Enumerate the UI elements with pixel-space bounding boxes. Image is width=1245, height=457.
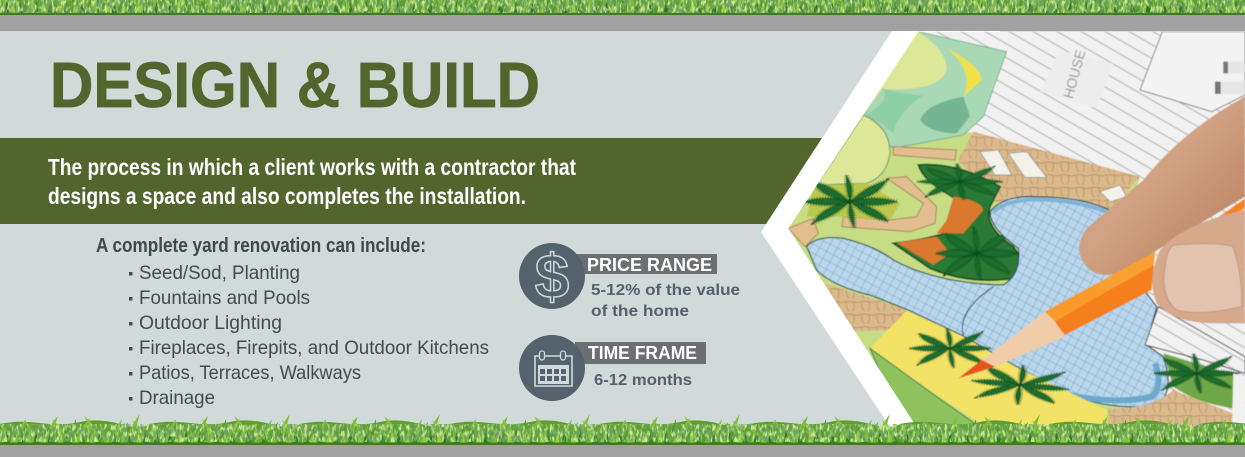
stone terrace: [958, 132, 1140, 210]
list item: fireplaces: Fireplaces, Firepits, and Outdoor Kitchens: [139, 337, 489, 359]
list item: patios: Patios, Terraces, Walkways: [139, 362, 361, 384]
heading: DESIGN & BUILD: [50, 49, 540, 121]
price value: of the home: [591, 303, 689, 320]
pencil: [958, 198, 1245, 378]
list item: fountains: Fountains and Pools: [139, 287, 310, 309]
white chevron frame: [761, 31, 1000, 430]
curved stone steps: [788, 147, 957, 247]
description text: The process in which a client works with a contractor that: [48, 154, 576, 180]
garden base: [789, 132, 1166, 424]
thumbnail: [1164, 244, 1242, 313]
lower palms: [909, 328, 1076, 409]
bottom grass strip: [0, 413, 1245, 445]
time frame block: [519, 335, 706, 401]
swimming pool: [807, 197, 1168, 407]
list heading: A complete yard renovation can include:: [96, 235, 426, 257]
yellow planting strip: [870, 310, 1107, 427]
garden palms upper: [802, 163, 1018, 280]
icon: calendar: [519, 335, 585, 401]
house outline on the plan: [1140, 32, 1245, 112]
lower right margin: [1232, 372, 1245, 422]
pool inner line: [962, 287, 993, 336]
pool coping: [1070, 363, 1158, 400]
price range block: [519, 243, 740, 320]
olive description band: [0, 138, 822, 224]
finger: [1079, 97, 1245, 275]
lower right stone path: [1108, 390, 1233, 427]
price value: [591, 282, 740, 320]
green planting strip: [868, 346, 975, 424]
left tree bed: [807, 183, 900, 220]
upper lawn and stream: [788, 30, 1007, 228]
terrace seating pads: [980, 150, 1127, 202]
photo: hand drawing a landscape plan: [783, 30, 1245, 443]
list item: seed and sod: Seed/Sod, Planting: [139, 262, 300, 284]
lower plan hatch area: [1145, 307, 1245, 373]
description text: designs a space and also completes the installation.: [48, 183, 526, 209]
plan windows: [1221, 62, 1245, 94]
pool coping upper: [993, 199, 1107, 212]
icon: dollar sign: [519, 243, 585, 312]
thumb: [1152, 210, 1245, 323]
time label bar: [575, 342, 706, 364]
house label on the plan: [1040, 48, 1113, 108]
flower bed: [893, 165, 1019, 280]
bottom grey band: [0, 444, 1245, 457]
top grass strip: [0, 0, 1245, 15]
top grey band: [0, 15, 1245, 31]
house label on the plan: HOUSE: [1060, 48, 1088, 100]
time value: 6-12 months: [594, 372, 692, 389]
plan window ends: [1215, 62, 1228, 94]
icon: dollar sign: $: [535, 243, 569, 312]
time label: TIME FRAME: [588, 343, 697, 363]
lower right plantings: [1153, 353, 1240, 408]
price label: PRICE RANGE: [587, 255, 712, 275]
price label bar: [575, 254, 717, 274]
price value: 5-12% of the value: [591, 282, 740, 299]
renovation list: [129, 262, 489, 409]
list item: lighting: Outdoor Lighting: [139, 312, 282, 334]
description text: [48, 154, 576, 209]
list item: drainage: Drainage: [139, 387, 215, 409]
lower stone patio: [825, 283, 908, 332]
